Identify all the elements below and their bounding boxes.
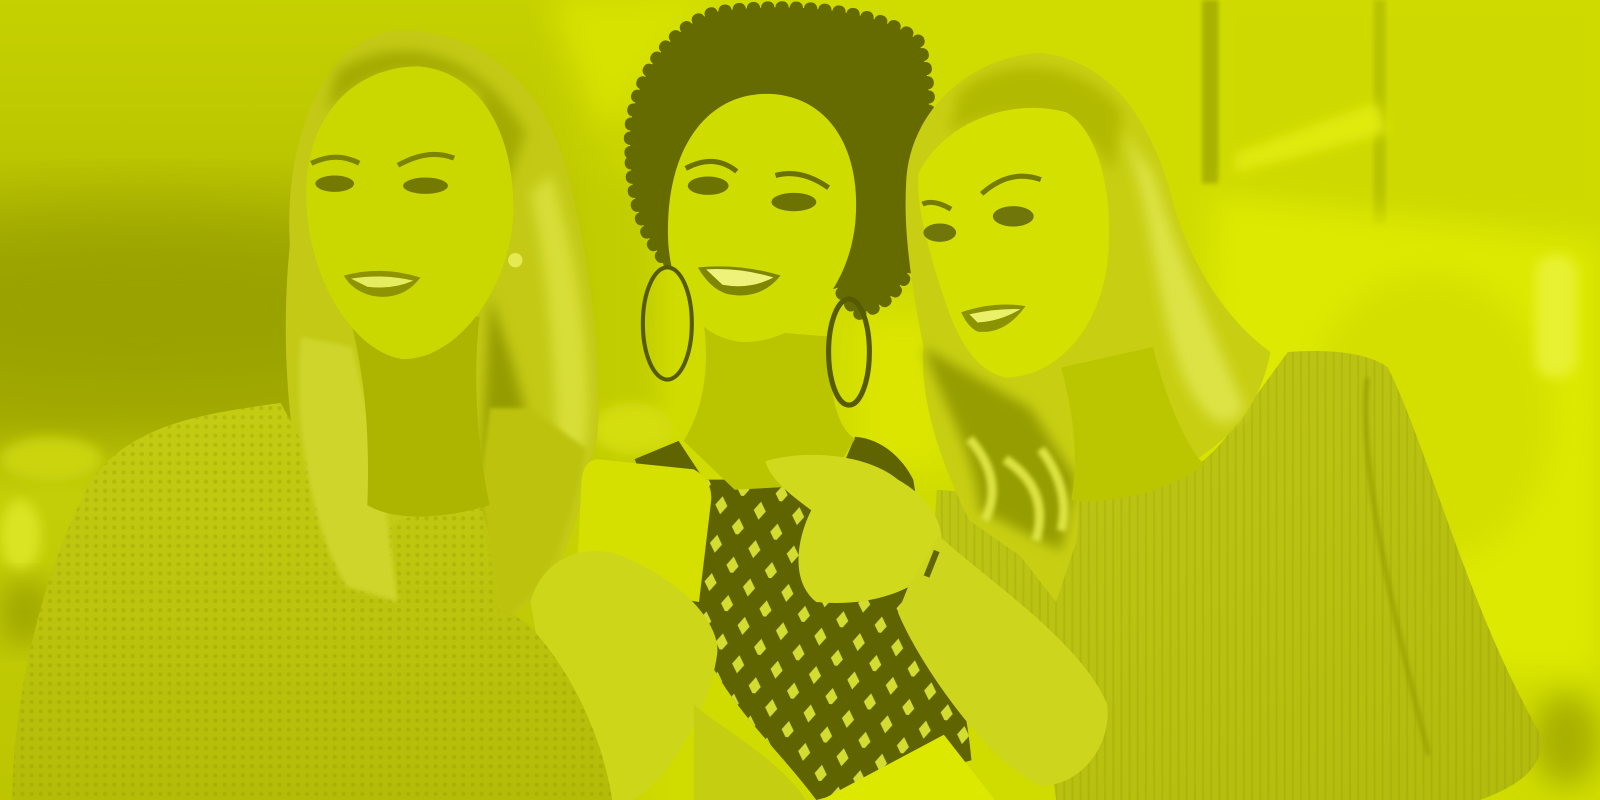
left woman: face: [306, 66, 513, 359]
left woman: hair back: [286, 30, 599, 620]
right woman: eyes and brows: [922, 176, 1041, 242]
icon: right hoop earring: [829, 299, 869, 405]
left woman: neck: [352, 316, 490, 517]
left woman: sweater: [12, 403, 617, 800]
left woman: mouth: [344, 271, 420, 297]
right woman: neck: [1061, 347, 1204, 501]
right woman: hair: [906, 53, 1270, 602]
middle woman: face: [668, 94, 856, 342]
right woman: sweater: [934, 351, 1541, 800]
woman in the middle: [630, 7, 971, 800]
woman on the left: [12, 30, 617, 800]
bag handle area: [694, 704, 806, 800]
right woman: mouth: [961, 305, 1026, 332]
middle woman: curly hair: [630, 7, 929, 314]
middle woman: dress: [635, 437, 971, 800]
left woman: earring: [508, 253, 522, 267]
right woman: sleeve: [898, 536, 1108, 786]
shopping bag: [821, 735, 995, 800]
phone held by left woman: [577, 459, 711, 602]
icon: left hoop earring: [643, 267, 692, 380]
pointing hand: [765, 455, 942, 603]
middle woman: smile: [698, 266, 781, 295]
left woman: eyes and brows: [311, 154, 454, 194]
holding hand: [531, 551, 717, 800]
foreground: phone and hands: [531, 455, 1108, 800]
left woman: hair front strands: [299, 337, 398, 602]
middle woman: eyes and brows: [686, 161, 829, 211]
woman on the right: [906, 53, 1541, 800]
middle woman: neck and chest: [684, 327, 855, 490]
right woman: face: [918, 108, 1109, 378]
watch strap: [927, 551, 937, 577]
